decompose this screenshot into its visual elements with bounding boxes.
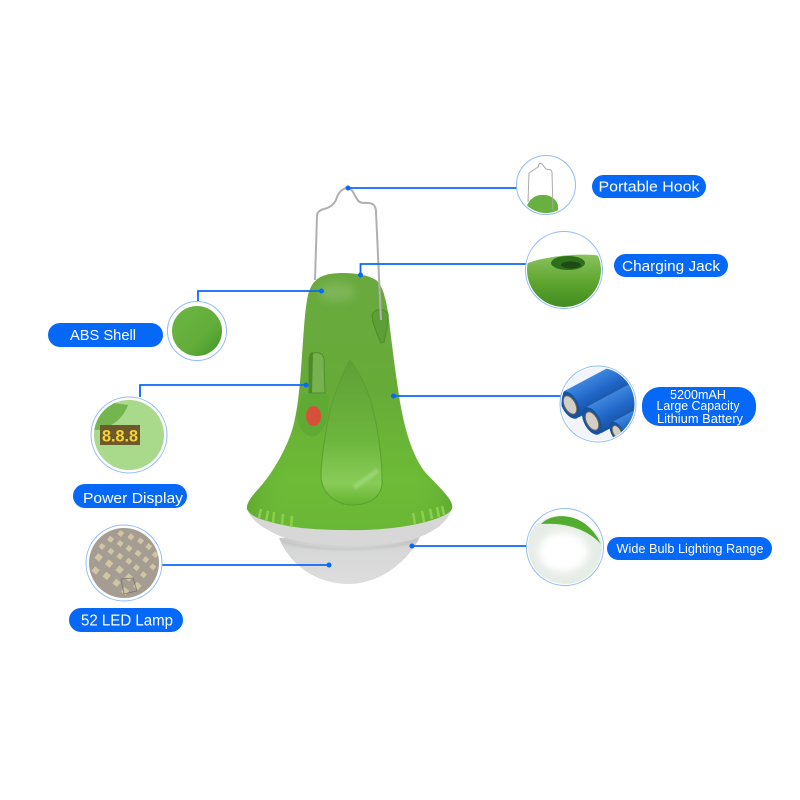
label pill bbox=[592, 175, 706, 198]
label pill bbox=[73, 484, 187, 508]
handle recess bbox=[321, 360, 382, 505]
label pill bbox=[69, 608, 183, 632]
detail circle: hook bbox=[516, 156, 576, 216]
dome lens bbox=[279, 535, 421, 584]
detail circle: display bbox=[91, 397, 167, 473]
connector line bbox=[394, 395, 561, 397]
display slot bbox=[309, 353, 325, 393]
product: solar lamp bbox=[247, 188, 452, 584]
label pill bbox=[48, 323, 163, 347]
label pill: ABS Shell bbox=[70, 327, 136, 344]
green body bbox=[247, 273, 452, 530]
label pill bbox=[642, 387, 756, 426]
label pill: 5200mAH bbox=[670, 388, 726, 402]
detail circle: shell bbox=[168, 302, 226, 360]
rim ridges right bbox=[413, 506, 444, 524]
button recess bbox=[297, 394, 329, 437]
detail circle: display: 8.8.8 bbox=[102, 426, 138, 446]
connector line bbox=[162, 564, 329, 566]
connector line bbox=[348, 187, 517, 189]
battery cells bbox=[562, 368, 632, 419]
detail circle: glowing bulb bbox=[526, 500, 604, 586]
label pill: 52 LED Lamp bbox=[81, 612, 173, 630]
label pill: Charging Jack bbox=[622, 258, 721, 275]
callout: power display bbox=[73, 382, 308, 508]
label pill: Power Display bbox=[83, 490, 184, 507]
hook eyelet bbox=[372, 310, 388, 343]
label pill: Portable Hook bbox=[598, 178, 700, 196]
connector line bbox=[198, 291, 322, 301]
callout: charging jack bbox=[358, 232, 728, 310]
detail circle: LEDs bbox=[86, 524, 162, 602]
connector line bbox=[412, 545, 527, 547]
label pill: Wide Bulb Lighting Range bbox=[616, 541, 764, 556]
callout: wide lighting range bbox=[410, 500, 772, 586]
red power button bbox=[306, 406, 321, 426]
LED chips bbox=[92, 530, 158, 596]
connector line bbox=[360, 264, 527, 275]
callout: ABS shell bbox=[48, 288, 324, 360]
detail circle: batteries bbox=[560, 366, 636, 442]
connector line bbox=[140, 385, 306, 397]
callout: lithium battery bbox=[391, 366, 756, 442]
callout: LED lamp bbox=[69, 520, 332, 632]
label pill: Lithium Battery bbox=[657, 412, 744, 426]
rim ridges left bbox=[259, 509, 292, 527]
callout: portable hook bbox=[346, 156, 706, 216]
shoulder highlight bbox=[319, 282, 355, 302]
label pill bbox=[607, 537, 772, 560]
label pill bbox=[614, 254, 728, 277]
grey rim bbox=[247, 500, 452, 546]
wire hook bbox=[315, 188, 381, 320]
label pill: Large Capacity bbox=[656, 399, 740, 413]
detail circle: jack bbox=[526, 232, 604, 310]
handle highlight bbox=[354, 470, 378, 487]
